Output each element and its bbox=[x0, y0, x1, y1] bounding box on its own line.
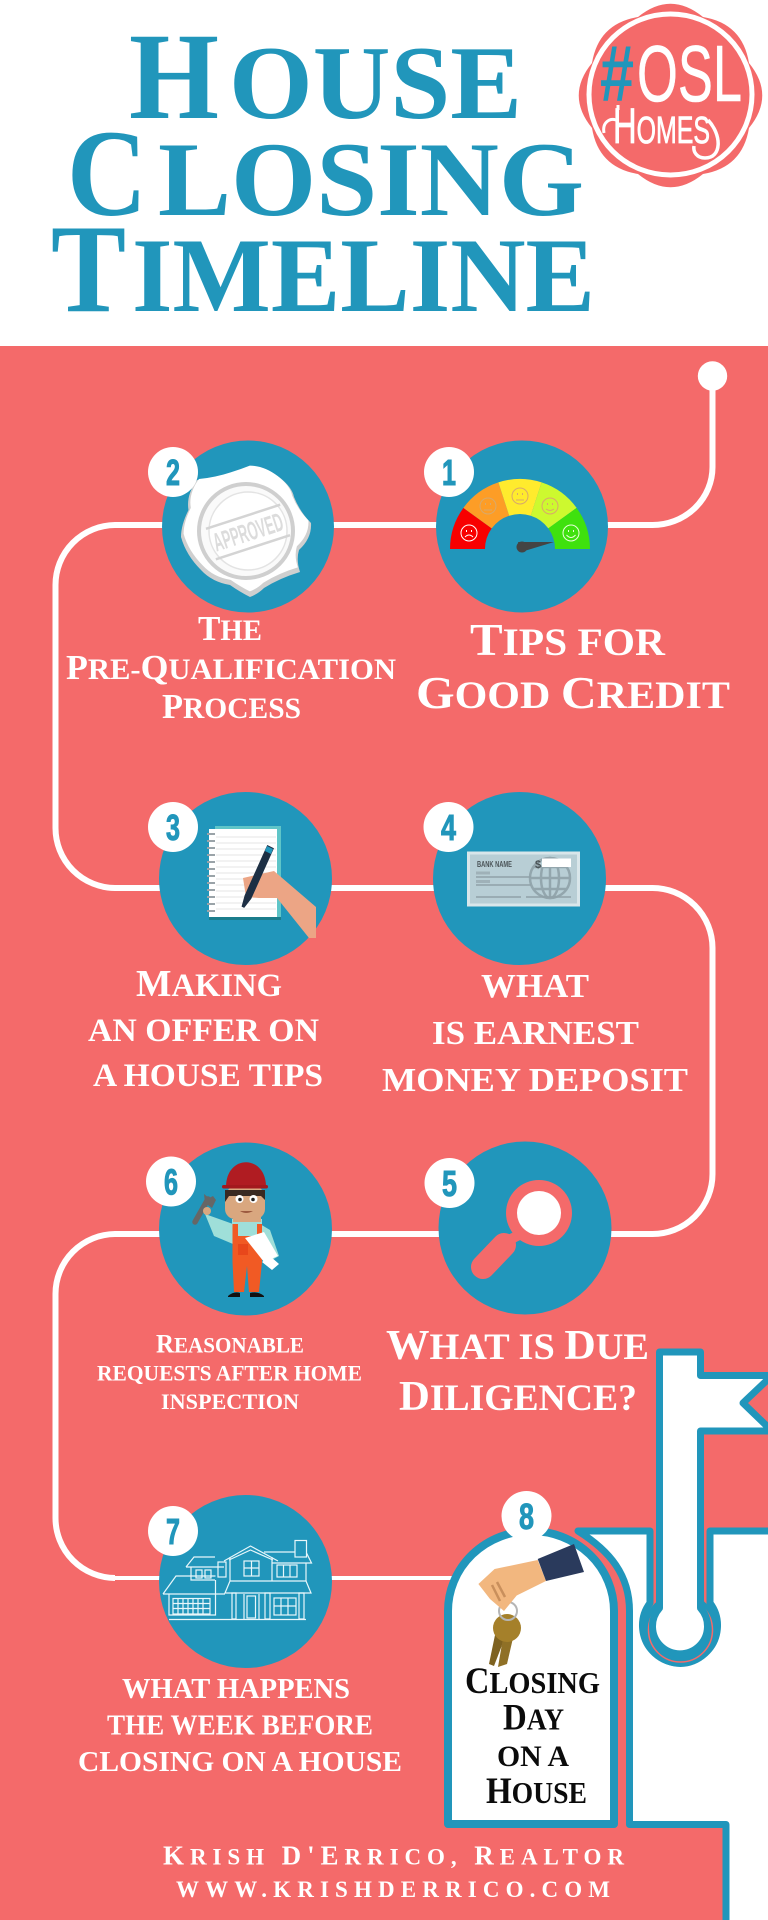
timeline start dot bbox=[698, 361, 727, 391]
icon: bank check: $ bbox=[535, 859, 541, 871]
number badge 1: 1 bbox=[442, 452, 456, 493]
footer credit bbox=[163, 1840, 624, 1902]
icon: repairman bbox=[195, 1162, 279, 1297]
timeline path bbox=[56, 376, 712, 1578]
number badge 4: 4 bbox=[441, 807, 456, 848]
label: making an offer on a house tips: MAKING bbox=[136, 963, 282, 1005]
step 2: pre-qualification bbox=[148, 440, 334, 612]
number badge 2: 2 bbox=[166, 452, 180, 493]
number badge 3 bbox=[148, 802, 198, 852]
number badge 6: 6 bbox=[164, 1162, 178, 1202]
logo badge bbox=[579, 4, 762, 187]
title: H bbox=[129, 8, 219, 145]
number badge 5: 5 bbox=[442, 1163, 457, 1204]
footer credit: K RISH D'E RRICO, R EALTOR bbox=[163, 1840, 624, 1870]
label: what is due diligence bbox=[386, 1323, 649, 1420]
flag and white ground bbox=[578, 1352, 768, 1920]
number badge 7: 7 bbox=[166, 1511, 180, 1552]
number badge 2 bbox=[148, 447, 198, 497]
step 7: week before closing bbox=[148, 1495, 332, 1668]
label: what happens the week before closing: THE WEEK BEFORE bbox=[107, 1710, 373, 1742]
step 6: inspection requests bbox=[146, 1142, 332, 1316]
label: closing day on a house: CLOSING bbox=[465, 1661, 600, 1702]
title bbox=[51, 8, 595, 339]
logo badge: # bbox=[600, 29, 634, 118]
label: what happens the week before closing: CLOSING ON A HOUSE bbox=[78, 1747, 402, 1778]
label: closing day on a house: ON A bbox=[497, 1740, 569, 1773]
number badge 4 bbox=[424, 802, 474, 852]
step 1: good credit bbox=[424, 440, 608, 612]
title: LOSING bbox=[158, 121, 584, 238]
header background bbox=[0, 0, 768, 346]
step 5: due diligence bbox=[424, 1142, 612, 1314]
icon: approved wax seal: APPROVED bbox=[209, 507, 287, 557]
number badge 3: 3 bbox=[166, 807, 180, 848]
step 8: closing day door bbox=[448, 1491, 614, 1824]
title: C bbox=[67, 105, 147, 242]
label: closing day on a house: DAY bbox=[503, 1698, 564, 1738]
label: making an offer on a house tips: AN OFFER ON bbox=[88, 1013, 319, 1049]
label: what happens the week before closing: WHAT HAPPENS bbox=[122, 1674, 350, 1705]
icon: house line drawing bbox=[163, 1540, 312, 1620]
label: tips for good credit bbox=[416, 614, 730, 718]
number badge 5 bbox=[424, 1158, 474, 1208]
label: reasonable requests after home inspection bbox=[97, 1330, 362, 1414]
label: closing day on a house bbox=[465, 1661, 600, 1812]
label: what is earnest money deposit: IS EARNEST bbox=[432, 1015, 639, 1052]
label: the pre-qualification process: THE bbox=[198, 609, 262, 648]
logo badge: HOMES bbox=[613, 98, 710, 154]
icon: credit gauge bbox=[450, 479, 590, 552]
label: reasonable requests after home inspection: REQUESTS AFTER HOME bbox=[97, 1360, 362, 1386]
label: what is earnest money deposit: WHAT bbox=[481, 968, 589, 1005]
label: what is earnest money deposit bbox=[382, 968, 688, 1099]
label: the pre-qualification process: PRE-QUALIFICATION bbox=[66, 648, 396, 687]
title: T bbox=[51, 200, 126, 339]
footer credit: WWW.KRISHDERRICO.COM bbox=[176, 1877, 610, 1902]
label: what happens the week before closing bbox=[78, 1674, 402, 1778]
icon: hand with keys bbox=[478, 1544, 584, 1667]
number badge 8 bbox=[502, 1491, 552, 1541]
label: closing day on a house: HOUSE bbox=[486, 1771, 587, 1812]
label: the pre-qualification process bbox=[66, 609, 396, 726]
icon: notebook and hand bbox=[207, 826, 316, 938]
number badge 6 bbox=[146, 1156, 196, 1206]
icon: magnifying glass bbox=[483, 1180, 572, 1267]
step 3: making an offer bbox=[148, 792, 332, 965]
number badge 7 bbox=[148, 1506, 198, 1556]
label: tips for good credit: TIPS FOR bbox=[470, 614, 666, 665]
label: making an offer on a house tips: A HOUSE TIPS bbox=[93, 1058, 323, 1094]
icon: approved wax seal bbox=[181, 466, 311, 597]
label: reasonable requests after home inspection: REASONABLE bbox=[156, 1330, 304, 1358]
label: what is due diligence: WHAT IS DUE bbox=[386, 1323, 649, 1369]
label: tips for good credit: GOOD CREDIT bbox=[416, 667, 730, 718]
number badge 8: 8 bbox=[519, 1496, 534, 1537]
number badge 1 bbox=[424, 447, 474, 497]
title: OUSE bbox=[229, 24, 522, 141]
label: what is due diligence: DILIGENCE? bbox=[399, 1374, 637, 1420]
label: the pre-qualification process: PROCESS bbox=[162, 687, 301, 726]
step 4: earnest money bbox=[424, 792, 606, 965]
label: reasonable requests after home inspection: INSPECTION bbox=[161, 1389, 299, 1414]
label: making an offer on a house tips bbox=[88, 963, 323, 1094]
icon: bank check: BANK NAME bbox=[477, 860, 512, 869]
title: IMELINE bbox=[132, 217, 595, 334]
label: what is earnest money deposit: MONEY DEPOSIT bbox=[382, 1062, 688, 1099]
icon: bank check bbox=[468, 853, 578, 905]
